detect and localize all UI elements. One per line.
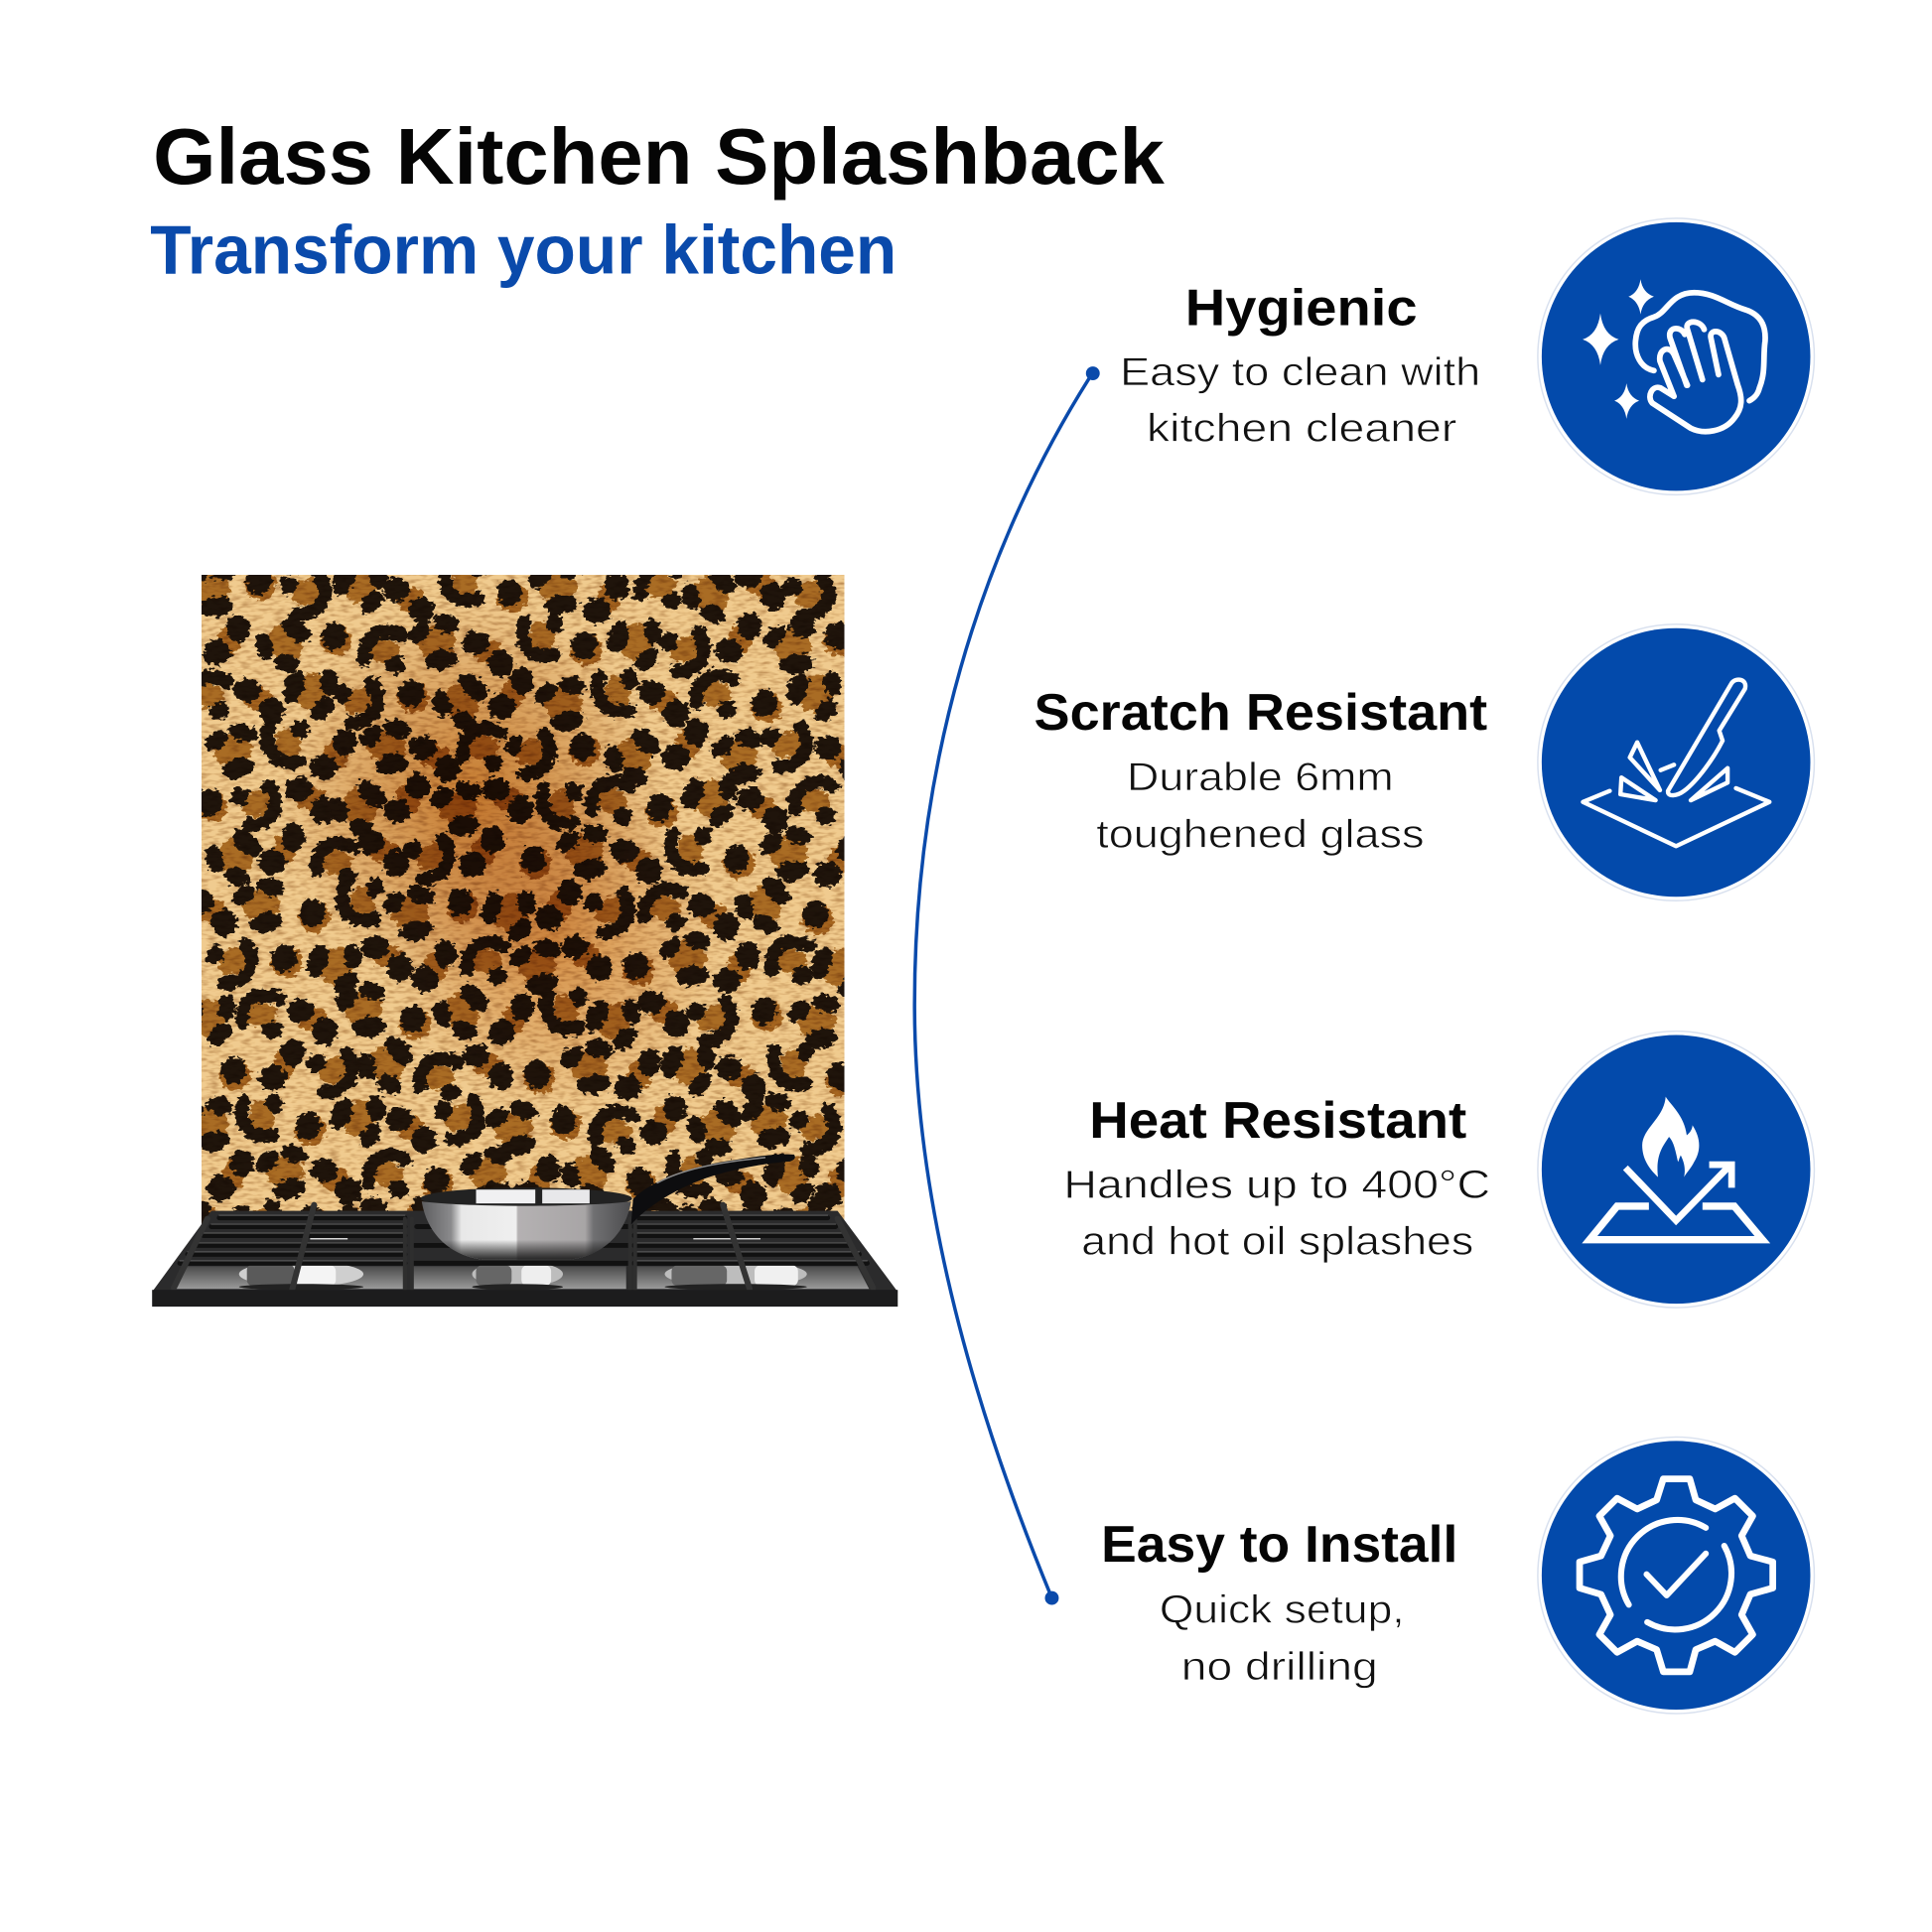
splashback product image — [152, 541, 897, 1307]
burner trays — [176, 1266, 869, 1289]
feature: easy to install — [1101, 1437, 1814, 1714]
curved connector line — [914, 366, 1100, 1605]
cast iron grates — [174, 1205, 873, 1289]
description: heat resistant: Handles up to 400°C — [1063, 1164, 1490, 1207]
description: easy to install: Quick setup, — [1160, 1587, 1405, 1631]
leopard print glass panel — [202, 575, 844, 1224]
description: easy to install — [1160, 1587, 1405, 1689]
feature: heat resistant — [1063, 1032, 1814, 1308]
icon: gear with check — [1538, 1437, 1814, 1714]
description: hygienic: Easy to clean with — [1120, 350, 1480, 394]
description: scratch resistant: toughened glass — [1096, 813, 1425, 857]
description: scratch resistant: Durable 6mm — [1127, 756, 1394, 799]
burners — [239, 1234, 807, 1290]
feature: scratch resistant — [1035, 624, 1814, 900]
description: scratch resistant — [1096, 756, 1425, 857]
description: hygienic — [1120, 350, 1480, 451]
subtitle: Transform your kitchen — [150, 211, 897, 289]
description: heat resistant — [1063, 1164, 1490, 1263]
description: heat resistant: and hot oil splashes — [1081, 1219, 1473, 1263]
heading: heat resistant: Heat Resistant — [1089, 1091, 1466, 1149]
heading: scratch resistant: Scratch Resistant — [1035, 683, 1487, 741]
icon: knife on glass — [1538, 624, 1814, 900]
feature: hygienic — [1120, 218, 1814, 494]
icon: flame and reflected arrow — [1538, 1032, 1814, 1308]
hob front edge — [152, 1290, 897, 1307]
description: easy to install: no drilling — [1181, 1645, 1378, 1689]
description: hygienic: kitchen cleaner — [1147, 407, 1456, 451]
frying pan — [421, 1155, 795, 1260]
heading: hygienic: Hygienic — [1185, 278, 1418, 336]
infographic content — [150, 112, 1814, 1714]
heading: easy to install: Easy to Install — [1101, 1515, 1457, 1573]
icon: wiping hand — [1538, 218, 1814, 494]
gas hob — [152, 1205, 897, 1307]
title: Glass Kitchen Splashback — [153, 112, 1166, 201]
